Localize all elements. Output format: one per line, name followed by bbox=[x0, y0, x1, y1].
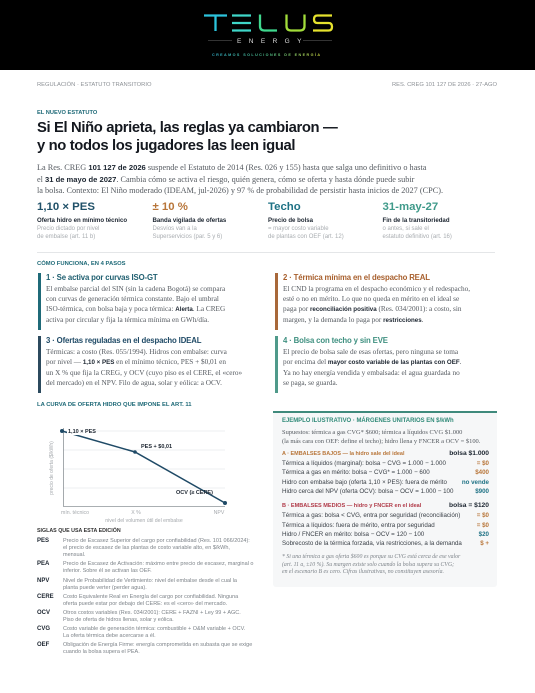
panel: illustrative example bbox=[273, 411, 497, 587]
glossary: Precio de Escasez de Activación: máximo entre precio de escasez, marginal o bbox=[63, 560, 253, 566]
panel heading: EJEMPLO ILUSTRATIVO · MÁRGENES UNITARIOS EN $/kWh bbox=[282, 418, 454, 424]
scenario A: = $0 bbox=[477, 460, 489, 466]
title: Si El Niño aprieta, las reglas ya cambiaron — bbox=[37, 120, 337, 136]
footnote bbox=[282, 553, 460, 575]
scenario B: = $0 bbox=[477, 522, 489, 528]
step 3: por nivel — 1,10 × PES en el mínimo técnico, PES + $0,01 en bbox=[46, 358, 226, 366]
logo: TELUS Energy: CREAMOS SOLUCIONES DE ENERGÍA bbox=[212, 52, 321, 57]
step 1: con curvas de generación térmica constante. Bajo el umbral bbox=[46, 295, 219, 303]
scenario A: Hidro cerca del NPV (oferta OCV): bolsa − OCV = 1.000 − 100 bbox=[282, 488, 453, 495]
scenario B: Térmica a líquidos: fuera de mérito, entra por seguridad bbox=[282, 522, 435, 528]
intro text: el 31 de mayo de 2027. Cambia cómo se activa el riesgo, quién genera, cómo se oferta y hasta dónde puede subir bbox=[37, 174, 414, 184]
glossary: CVG bbox=[37, 626, 50, 632]
step 2 bbox=[275, 273, 470, 330]
step 3: 3 · Ofertas reguladas en el despacho IDEAL bbox=[46, 336, 201, 345]
step 4: se paga, se guarda. bbox=[283, 379, 338, 387]
KPI: 1,10 × PES bbox=[37, 201, 127, 240]
step 4: 4 · Bolsa con techo y sin EVE bbox=[283, 336, 388, 345]
kicker: EL NUEVO ESTATUTO bbox=[37, 110, 97, 116]
step 3: Térmicas: a costo (Res. 055/1994). Hidros con embalse: curva bbox=[46, 348, 227, 356]
scenario B: Térmica a gas: bolsa < CVG, entra por seguridad (reconciliación) bbox=[282, 512, 460, 519]
footnote: (art. 11 a, ±10 %). Su margen existe solo cuando la bolsa supera su CVG; bbox=[282, 562, 454, 568]
chart: hydro supply curve: OCV (≥ CERE) bbox=[176, 490, 213, 496]
KPI: 1,10 × PES: Precio dictado por nivel bbox=[37, 226, 99, 232]
KPI: 31-may-27: estatuto definitivo (art. 16) bbox=[382, 234, 452, 240]
header band bbox=[0, 0, 535, 70]
top meta left: REGULACIÓN · ESTATUTO TRANSITORIO bbox=[37, 82, 151, 88]
chart: hydro supply curve: mín. técnico bbox=[61, 510, 89, 516]
glossary: Piso de oferta de hidros llenas, solar y eólica. bbox=[63, 617, 174, 623]
intro text: la bolsa. Contexto: El Niño moderado (IDEAM, jul-2026) y 97 % de probabilidad de persistir hasta inicios de 2027 (CPC). bbox=[37, 186, 443, 195]
logo: TELUS Energy bbox=[204, 14, 334, 57]
assumptions: Supuestos: térmica a gas CVG* $600; térmica a líquidos CVG $1.000 bbox=[282, 429, 462, 436]
title: y no todos los jugadores las leen igual bbox=[37, 138, 295, 154]
step 1: El embalse parcial del SIN (sin la cadena Bogotá) se compara bbox=[46, 285, 225, 293]
KPI: 1,10 × PES: de embalse (art. 11 b) bbox=[37, 234, 95, 240]
glossary heading: SIGLAS QUE USA ESTA EDICIÓN bbox=[37, 528, 121, 534]
scenario A: Térmica a líquidos (marginal): bolsa − CVG = 1.000 − 1.000 bbox=[282, 460, 446, 466]
KPI: ± 10 %: Superservicios (par. 5 y 6) bbox=[152, 234, 222, 240]
scenario B: Hidro / FNCER en mérito: bolsa − OCV = 120 − 100 bbox=[282, 531, 424, 538]
scenario B: $20 bbox=[479, 531, 489, 538]
scenario B: B · EMBALSES MEDIOS — hidro y FNCER en el ideal bbox=[282, 503, 421, 509]
KPI: Techo bbox=[268, 201, 344, 240]
curve line bbox=[60, 429, 227, 505]
step 3: un X % que fija la CREG, y OCV (cuyo piso es el CERE, el «cero» bbox=[46, 369, 242, 377]
KPI: ± 10 % bbox=[152, 201, 226, 240]
step 2: margen, y la demanda lo paga por restricciones. bbox=[283, 316, 423, 324]
KPI: 31-may-27 bbox=[382, 201, 452, 240]
section heading: chart: LA CURVA DE OFERTA HIDRO QUE IMPONE EL ART. 11 bbox=[37, 402, 192, 408]
KPI: ± 10 %: ± 10 % bbox=[152, 201, 188, 213]
intro text: La Res. CREG 101 127 de 2026 suspende el Estatuto de 2014 (Res. 026 y 155) hasta que salga uno definitivo o hasta bbox=[37, 163, 426, 172]
step 3: del mercado) en el NPV. Filo de agua, solar y eólica: a OCV. bbox=[46, 379, 222, 387]
glossary: mensual. bbox=[63, 552, 85, 558]
glossary: PES bbox=[37, 538, 49, 544]
glossary: inferior. Sobre él se activan las OEF. bbox=[63, 568, 152, 574]
glossary: Precio de Escasez Superior del cargo por confiabilidad (Res. 101 066/2024): bbox=[63, 538, 250, 544]
glossary: Costo variable de generación térmica: combustible + O&M variable + OCV. bbox=[63, 626, 245, 632]
scenario A: bolsa $1.000 bbox=[449, 450, 489, 456]
glossary: NPV bbox=[37, 578, 49, 584]
KPI: Techo: Techo bbox=[268, 201, 301, 213]
chart: hydro supply curve: NPV bbox=[214, 510, 225, 516]
step 4: Ya no hay energía vendida y embalsada: el agua guardada no bbox=[283, 369, 460, 377]
chart: hydro supply curve: precio de oferta ($/kWh) bbox=[49, 441, 55, 495]
step 2: esté o no en mérito. Lo que no queda en mérito en el ideal se bbox=[283, 295, 459, 303]
step 2: El CND la programa en el despacho económico y el redespacho, bbox=[283, 285, 470, 293]
intro text bbox=[37, 163, 443, 195]
scenario A: $900 bbox=[475, 488, 489, 495]
glossary bbox=[37, 527, 254, 655]
step 1: 1 · Se activa por curvas ISO-GT bbox=[46, 273, 157, 282]
title bbox=[37, 120, 338, 154]
footnote: * Si una térmica a gas oferta $600 es porque su CVG está cerca de ese valor bbox=[282, 554, 460, 560]
glossary: Nivel de Probabilidad de Vertimiento: nivel del embalse desde el cual la bbox=[63, 578, 237, 584]
chart: hydro supply curve bbox=[49, 428, 227, 524]
step 3 bbox=[38, 336, 242, 393]
chart: hydro supply curve: nivel del volumen útil del embalse bbox=[105, 518, 183, 524]
glossary: cuando la bolsa supera el PEA. bbox=[63, 649, 140, 655]
step 2: 2 · Térmica mínima en el despacho REAL bbox=[283, 273, 430, 282]
KPI: ± 10 %: Banda vigilada de ofertas bbox=[152, 217, 226, 224]
step 1: activa por circular y fija la térmica mínima en GWh/día. bbox=[46, 316, 209, 324]
footnote: en el escenario B es cero. Cifras ilustrativas, no constituyen asesoría. bbox=[282, 569, 444, 575]
step 1: ISO-térmica, con bolsa baja y poca térmica: Alerta. La CREG bbox=[46, 305, 225, 313]
KPI: 31-may-27: 31-may-27 bbox=[382, 201, 438, 213]
KPI: Techo: Precio de bolsa bbox=[268, 217, 313, 224]
scenario A: no vende bbox=[462, 478, 489, 486]
glossary: oferta puede estar por debajo del CERE: es el «cero» del mercado. bbox=[63, 601, 227, 607]
scenario B: bolsa = $120 bbox=[449, 502, 489, 508]
scenario A bbox=[282, 450, 489, 495]
glossary: el precio de escasez de las plantas de costo variable alto, en $/kWh, bbox=[63, 545, 230, 551]
KPI: Techo: = mayor costo variable bbox=[268, 226, 329, 232]
assumptions: (la más cara con OEF: define el techo); hidro llena y FNCER a OCV = $100. bbox=[282, 438, 480, 445]
scenario B bbox=[282, 502, 489, 547]
scenario B: = $0 bbox=[477, 512, 489, 519]
glossary: Costo Equivalente Real en Energía del cargo por confiabilidad. Ninguna bbox=[63, 594, 238, 600]
glossary: OEF bbox=[37, 642, 49, 648]
scenario A: Térmica a gas en mérito: bolsa − CVG* = 1.000 − 600 bbox=[282, 469, 430, 476]
KPI: Techo: de plantas con OEF (art. 12) bbox=[268, 234, 344, 240]
chart: hydro supply curve: 1,10 × PES bbox=[68, 429, 96, 435]
glossary: OCV bbox=[37, 610, 50, 616]
glossary: Obligación de Energía Firme: energía comprometida en subasta que se exige bbox=[63, 642, 252, 648]
glossary: planta puede verter (perder agua). bbox=[63, 585, 147, 591]
top meta right: RES. CREG 101 127 DE 2026 · 27-AGO bbox=[392, 82, 497, 88]
scenario B: $ + bbox=[480, 540, 489, 547]
scenario A: Hidro con embalse bajo (oferta 1,10 × PES): fuera de mérito bbox=[282, 478, 447, 486]
step 4 bbox=[275, 336, 461, 393]
section heading: steps: CÓMO FUNCIONA, EN 4 PASOS bbox=[37, 260, 126, 266]
glossary: PEA bbox=[37, 560, 49, 566]
step 1 bbox=[38, 273, 226, 330]
step 4: El precio de bolsa sale de esas ofertas, pero ninguna se toma bbox=[283, 348, 458, 356]
chart: hydro supply curve: X % bbox=[131, 510, 141, 516]
chart: hydro supply curve: PES + $0,01 bbox=[141, 444, 172, 450]
KPI: 1,10 × PES: 1,10 × PES bbox=[37, 201, 95, 213]
scenario A: $400 bbox=[475, 469, 489, 476]
KPI: 1,10 × PES: Oferta hidro en mínimo técnico bbox=[37, 217, 127, 224]
KPI: 31-may-27: Fin de la transitoriedad bbox=[382, 217, 450, 224]
glossary: Otros costos variables (Res. 034/2001): CERE + FAZNI + Ley 99 + AGC. bbox=[63, 610, 241, 616]
glossary: CERE bbox=[37, 594, 54, 600]
assumptions bbox=[282, 429, 480, 445]
scenario A: A · EMBALSES BAJOS — la hidro sale del ideal bbox=[282, 451, 404, 457]
step 4: por encima del mayor costo variable de las plantas con OEF. bbox=[283, 358, 461, 366]
scenario B: Sobrecosto de la térmica forzada, vía restricciones, a la demanda bbox=[282, 540, 462, 547]
glossary: La oferta térmica debe acercarse a él. bbox=[63, 633, 156, 639]
step 2: paga por reconciliación positiva (Res. 034/2001): a costo, sin bbox=[283, 305, 461, 313]
KPI: 31-may-27: o antes, si sale el bbox=[382, 226, 429, 232]
logo: TELUS Energy: ENERGY bbox=[237, 38, 309, 45]
KPI: ± 10 %: Desvíos van a la bbox=[152, 226, 197, 232]
